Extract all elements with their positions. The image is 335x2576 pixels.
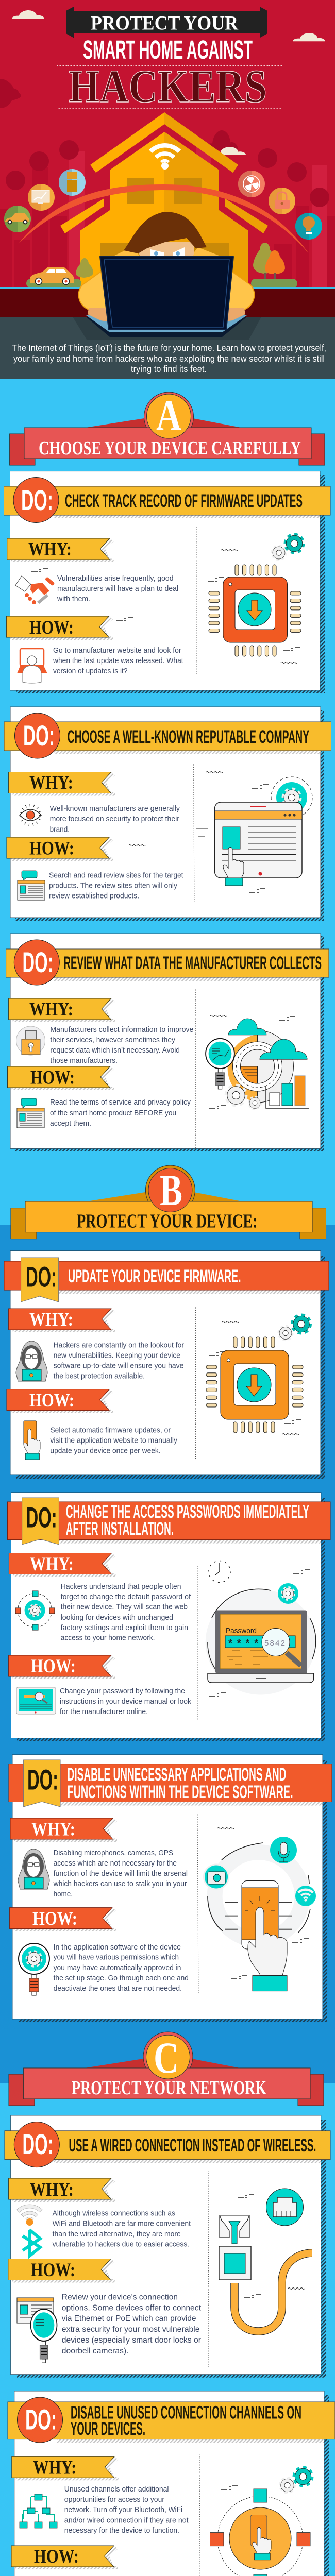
why text: than the wired alternative, they are more: [53, 2230, 181, 2239]
house: [60, 112, 268, 288]
icon: handshake: [15, 576, 55, 604]
section heading C: PROTECT YOUR NETWORK: [72, 2077, 266, 2099]
illustration: ethernet cable: [219, 2189, 312, 2331]
intro text: [12, 343, 326, 374]
how text: update your device once per week.: [50, 1447, 161, 1455]
why text: Vulnerabilities arise frequently, good: [57, 574, 174, 583]
how ribbon: HOW:: [32, 1908, 77, 1929]
why ribbon: WHY:: [29, 1309, 73, 1330]
illustration: password laptop: [206, 1561, 316, 1697]
why text: function of the device will limit the arsenal: [54, 1870, 188, 1878]
how text: [53, 647, 183, 675]
icon: network tree: [20, 2494, 57, 2528]
do banner: YOUR DEVICES.: [71, 2419, 145, 2439]
how text: extra security for your most vulnerable: [62, 2325, 200, 2334]
why text: forget to change the default password of: [61, 1593, 191, 1601]
icon: wifi and bluetooth: [17, 2205, 42, 2256]
illustration: phone permissions: [204, 1828, 316, 1991]
icon: web page with chat bubble: [17, 1098, 44, 1128]
how text: [54, 1943, 189, 1993]
do banner: DO:: [23, 2128, 54, 2160]
section heading A: A: [156, 391, 181, 440]
why text: [64, 2485, 189, 2535]
why text: Disabling microphones, cameras, GPS: [54, 1849, 173, 1857]
icon: phone with hand: [24, 1421, 40, 1460]
why text: [61, 1583, 191, 1642]
how text: Go to manufacturer website and look for: [53, 647, 181, 655]
how text: devices (especially smart door locks or: [62, 2336, 201, 2345]
how text: [49, 872, 183, 900]
why text: Unused channels offer additional: [64, 2485, 169, 2494]
how text: review established products.: [49, 892, 139, 900]
do banner: [8, 2397, 335, 2443]
device icons on arc: [4, 169, 322, 240]
how ribbon: [7, 1389, 113, 1413]
do banner with bookmark: [9, 1760, 332, 1807]
why text: opportunities for access to your: [64, 2496, 164, 2504]
illustration: password laptop: ****: [228, 1638, 258, 1649]
why text: which hackers can use to stalk you in your: [53, 1880, 187, 1888]
do banner: DO:: [25, 2403, 57, 2436]
icon: web page under magnifier: [17, 2298, 57, 2363]
why text: network. Turn off your Bluetooth, WiFi: [64, 2506, 182, 2514]
why text: home.: [54, 1890, 73, 1899]
why text: the best protection available.: [54, 1372, 145, 1381]
decorative white clouds: [12, 10, 325, 155]
how text: you will have various permissions which: [54, 1954, 179, 1962]
do banner: DO:: [23, 719, 55, 752]
icon: padlock: [16, 1026, 45, 1055]
why ribbon: [9, 1309, 115, 1332]
how text: instructions in your device manual or look: [60, 1698, 192, 1706]
why text: Hackers understand that people often: [61, 1583, 181, 1591]
why text: [50, 1026, 193, 1065]
panel: disable unused channels: [8, 2391, 335, 2576]
panel: update firmware: [4, 1251, 329, 1479]
do banner: DO:: [23, 946, 54, 978]
icon: hacker: [16, 1341, 47, 1381]
how text: [62, 2293, 202, 2355]
how text: of the smart home product BEFORE you: [50, 1109, 176, 1117]
do banner: [5, 2122, 330, 2167]
panel: check firmware: [4, 471, 330, 693]
why text: their new device. They will scan the web: [61, 1603, 188, 1612]
how ribbon: [10, 1908, 116, 1931]
why text: WiFi and Bluetooth are far more convenient: [53, 2219, 191, 2228]
icon: password tablet: [16, 1687, 56, 1714]
icon: magnifier with gear: [19, 1943, 49, 1995]
why ribbon: [7, 538, 114, 562]
signal arc: [18, 184, 309, 253]
why text: necessary for the device to function.: [64, 2527, 179, 2535]
how ribbon: [9, 1655, 115, 1679]
how text: visit the application website to manually: [50, 1437, 178, 1445]
how text: Review your device’s connection: [62, 2293, 178, 2302]
section heading B: PROTECT YOUR DEVICE:: [77, 1211, 258, 1232]
how text: In the application software of the device: [54, 1943, 181, 1952]
icon: person at monitor: [17, 649, 47, 683]
do banner: DO:: [21, 484, 53, 516]
section heading B: [11, 1165, 326, 1239]
why text: looking for devices with unchanged: [61, 1614, 173, 1622]
street with car and trees: [26, 243, 297, 288]
why text: Well-known manufacturers are generally: [50, 805, 180, 813]
why text: Manufacturers collect information to improve: [50, 1026, 193, 1034]
how text: deactivate the ones that are not needed.: [54, 1985, 182, 1993]
how ribbon: HOW:: [29, 617, 74, 638]
illustration: firmware chip: [31, 534, 304, 664]
how text: Search and read review sites for the target: [49, 872, 183, 880]
how ribbon: [8, 2259, 115, 2282]
why text: Although wireless connections such as: [53, 2210, 175, 2218]
how ribbon: HOW:: [31, 2260, 75, 2281]
panel: review data: [6, 934, 329, 1151]
title ribbon: PROTECT YOUR: [91, 12, 239, 34]
why text: software up-to-date will ensure you have: [54, 1362, 183, 1370]
why ribbon: WHY:: [33, 2458, 76, 2478]
how text: Change your password by following the: [60, 1687, 185, 1696]
how ribbon: [7, 837, 113, 861]
why text: brand.: [50, 825, 70, 834]
why text: their services, however sometimes they: [50, 1036, 176, 1044]
how text: when the last update was released. What: [53, 657, 183, 665]
title ribbon: [66, 7, 267, 38]
how text: options. Some devices offer to connect: [62, 2304, 202, 2313]
why ribbon: [9, 772, 115, 795]
why text: [53, 1849, 188, 1899]
why ribbon: [12, 2456, 119, 2480]
how ribbon: HOW:: [29, 838, 74, 859]
why text: factory settings and exploit them to gain: [61, 1624, 188, 1632]
why text: [50, 805, 180, 834]
how ribbon: HOW:: [30, 1067, 75, 1088]
how text: for the manufacturer online.: [60, 1708, 148, 1716]
section heading C: [9, 2032, 324, 2106]
panel: wired connection: [5, 2115, 330, 2378]
how ribbon: HOW:: [31, 1656, 76, 1677]
why text: with them.: [57, 595, 90, 603]
illustration: firmware chip: [206, 1315, 310, 1435]
why text: more focused on security to protect their: [50, 815, 179, 823]
how ribbon: [11, 2546, 118, 2569]
how text: products. The review sites often will only: [49, 882, 178, 890]
why text: vulnerable to hackers due to easier access.: [53, 2241, 189, 2249]
do banner with bookmark: DO:: [26, 1261, 57, 1293]
how text: Select automatic firmware updates, or: [50, 1426, 171, 1434]
why ribbon: [9, 2178, 115, 2202]
how text: Read the terms of service and privacy policy: [50, 1098, 191, 1107]
illustration: tablet with review: [129, 772, 312, 892]
do banner with bookmark: DO:: [27, 1763, 58, 1795]
section heading A: [10, 391, 325, 465]
hacker at laptop: [79, 212, 254, 337]
do banner: [4, 713, 331, 758]
why ribbon: WHY:: [29, 999, 73, 1020]
how text: the set up stage. Go through each one and: [54, 1974, 189, 1982]
how ribbon: [6, 616, 113, 640]
why ribbon: [9, 998, 115, 1022]
why text: manufacturers will have a plan to deal: [57, 585, 178, 593]
why text: and/or wired connection if they are not: [64, 2516, 189, 2524]
illustration: password laptop: 5842: [264, 1639, 285, 1648]
intro text: trying to find its feet.: [131, 364, 207, 374]
hero illustration panel: [0, 0, 335, 379]
how ribbon: [7, 1066, 114, 1090]
why text: [53, 2210, 191, 2249]
why text: Hackers are constantly on the lookout for: [54, 1342, 184, 1350]
how ribbon: HOW:: [29, 1390, 74, 1411]
do banner with bookmark: AFTER INSTALLATION.: [66, 1519, 174, 1539]
panel: reputable company: [4, 707, 331, 921]
section heading B: B: [160, 1165, 182, 1215]
illustration: channels circle: [210, 2467, 312, 2576]
why ribbon: WHY:: [31, 1819, 75, 1840]
how text: [50, 1426, 178, 1455]
section heading C: C: [154, 2033, 179, 2082]
how text: version of updates is it?: [53, 667, 128, 675]
how text: doorbell cameras).: [62, 2347, 129, 2355]
why ribbon: WHY:: [29, 772, 73, 793]
do banner with bookmark: [7, 1498, 330, 1545]
why ribbon: WHY:: [30, 2179, 74, 2200]
why text: access which are not necessary for the: [54, 1859, 177, 1868]
how text: you may have automatically approved in: [54, 1964, 181, 1972]
why text: access to your home network.: [61, 1634, 155, 1642]
why text: [54, 1342, 184, 1381]
why ribbon: WHY:: [30, 1554, 74, 1575]
why text: those manufacturers.: [50, 1057, 118, 1065]
do banner: [4, 477, 330, 522]
panel: change passwords: [7, 1493, 330, 1741]
why text: new vulnerabilities. Keeping your device: [54, 1352, 180, 1360]
do banner: [6, 940, 329, 985]
how text: via Ethernet or PoE which can provide: [62, 2314, 196, 2323]
icon: eye: [20, 805, 41, 825]
why text: request data which isn’t necessary. Avoid: [50, 1046, 180, 1055]
how text: [60, 1687, 192, 1716]
why ribbon: WHY:: [28, 539, 72, 560]
illustration: data analysis: [206, 1015, 309, 1109]
illustration: password laptop: Password: [226, 1626, 257, 1635]
icon: web page with chat bubble: [18, 871, 45, 900]
do banner with bookmark: [4, 1258, 329, 1302]
how ribbon: HOW:: [34, 2546, 79, 2567]
panel: disable applications: [9, 1755, 332, 2022]
why ribbon: [9, 1553, 115, 1577]
why text: [57, 574, 178, 603]
do banner with bookmark: DO:: [26, 1501, 57, 1533]
why ribbon: [10, 1818, 117, 1842]
how text: [50, 1098, 191, 1128]
title line 3: HACKERS: [69, 60, 267, 112]
icon: hacker: [18, 1849, 49, 1889]
icon: gear with nodes: [15, 1591, 55, 1630]
how text: accept them.: [50, 1120, 91, 1128]
